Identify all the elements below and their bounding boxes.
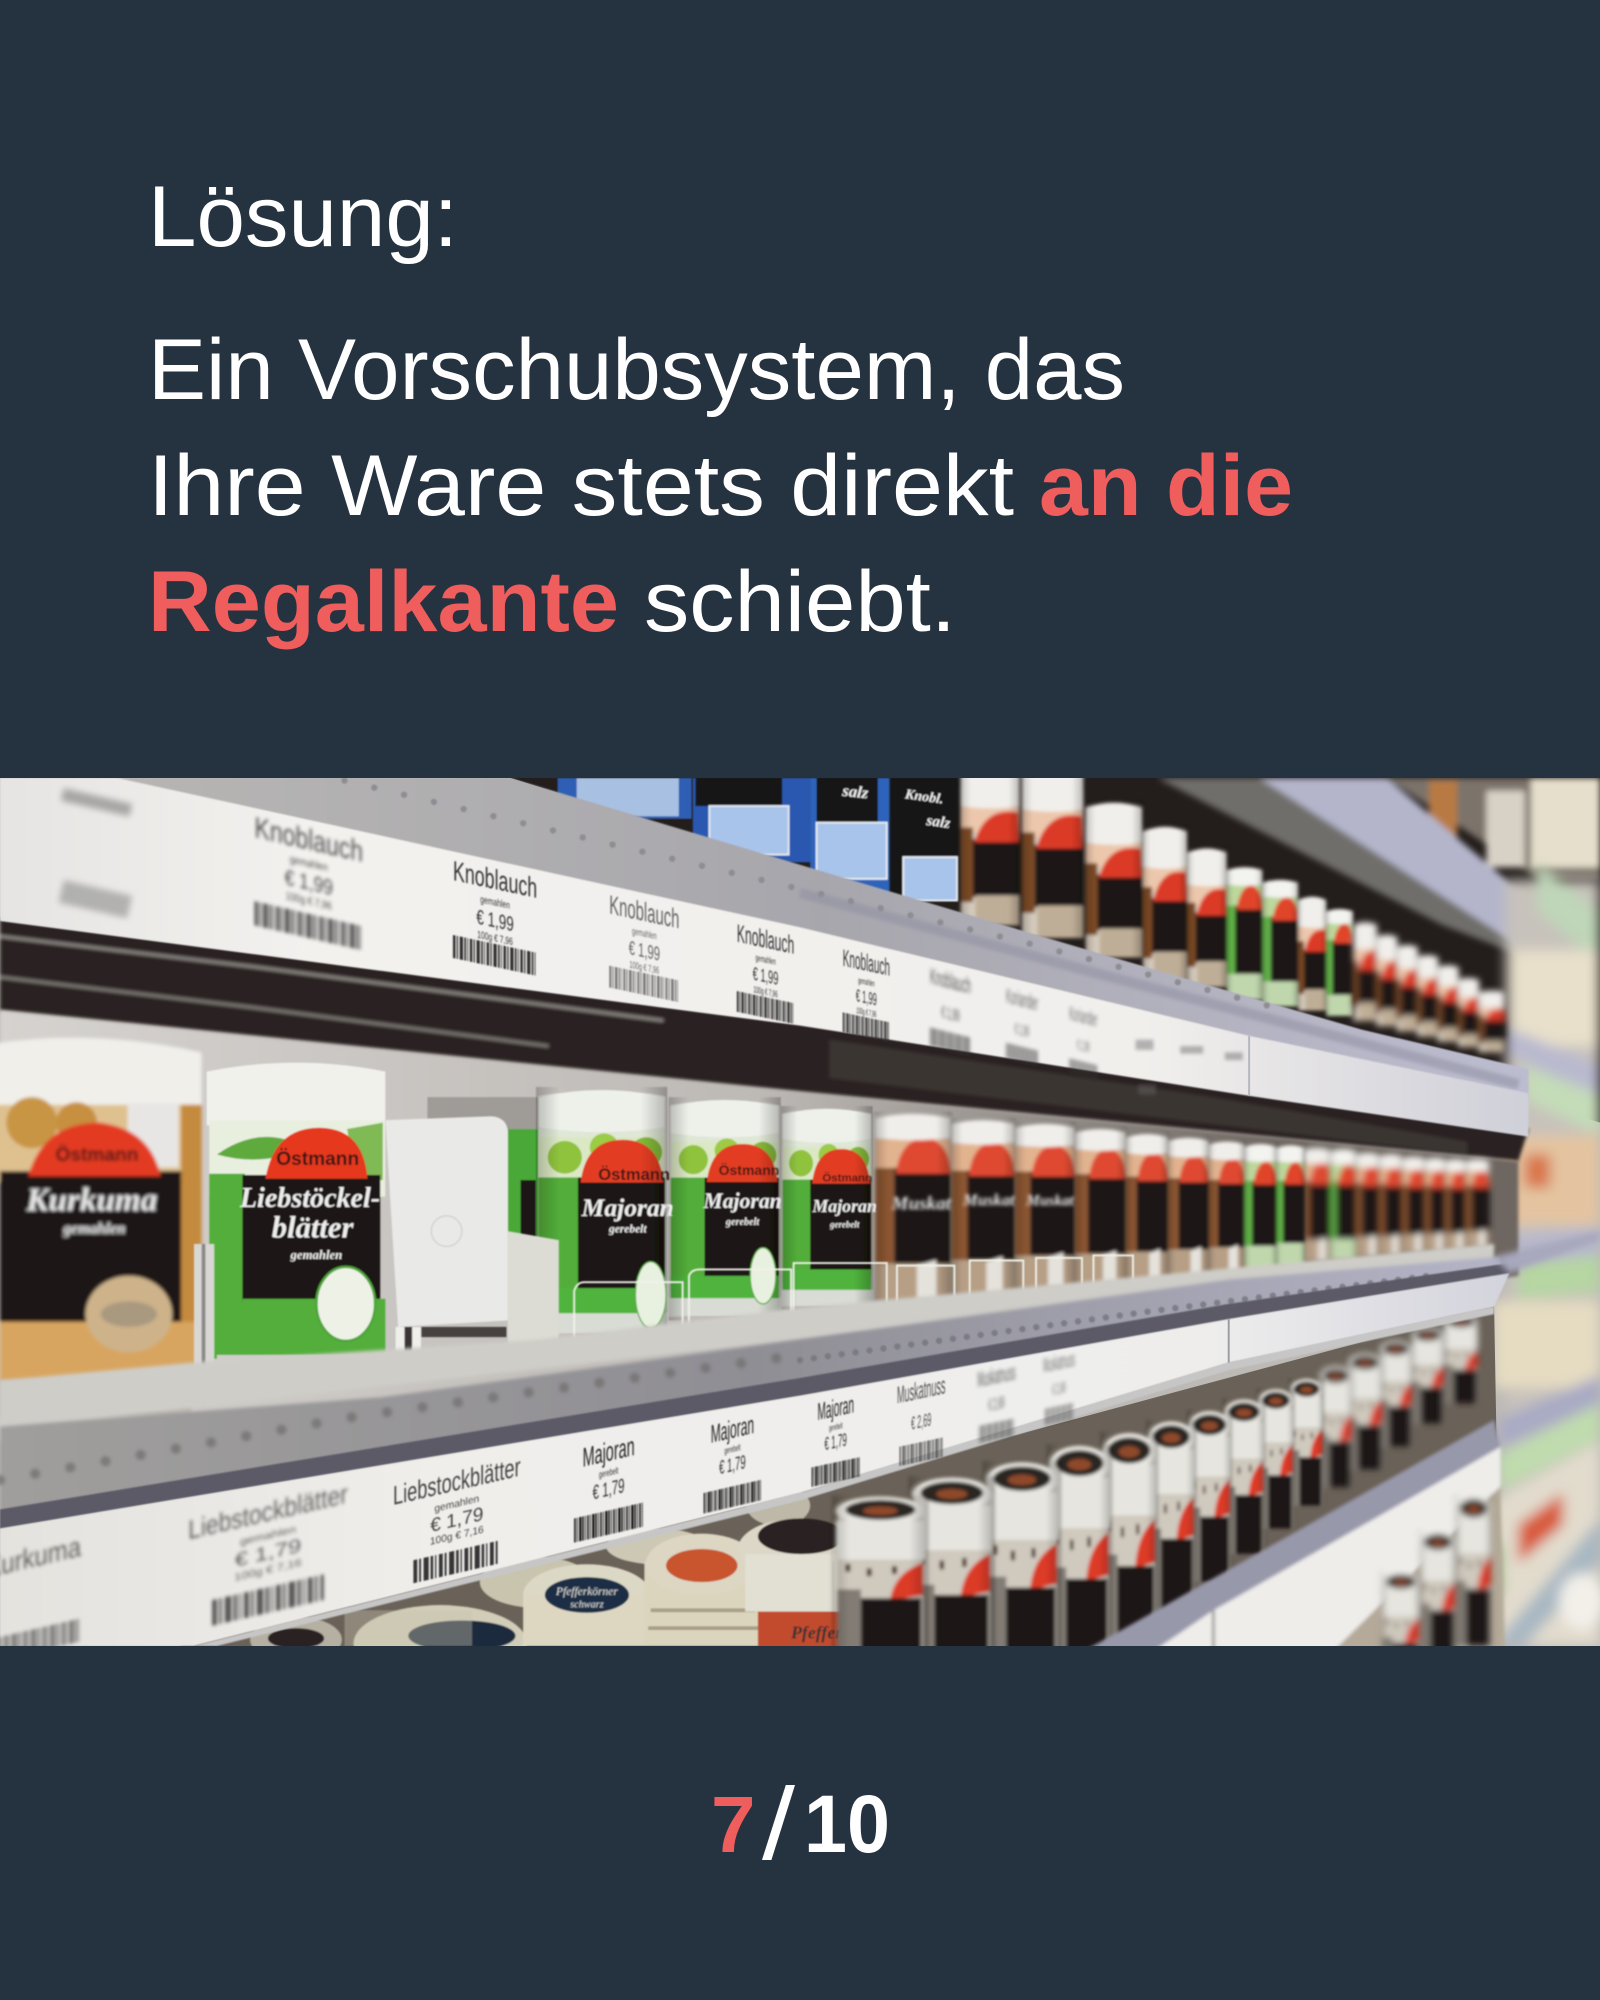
jar: Liebstöckelblätter: Liebstöckel- xyxy=(239,1183,380,1214)
heading: Lösung: Lösung: xyxy=(148,169,458,265)
price label: Koriander 1 xyxy=(1006,985,1038,1058)
jar: Majoran 1: gerebelt xyxy=(608,1223,647,1235)
heading line 1: Ein Vorschubsystem, das xyxy=(148,322,1125,418)
price label: Knoblauch 6: € 1,99 xyxy=(941,1003,960,1025)
price label: Muskatnuss 2: € 2,69 xyxy=(989,1393,1005,1415)
mid back wall xyxy=(0,1010,1518,1442)
price label: Majoran 2: gerebelt xyxy=(724,1443,740,1456)
middle shelf label strip xyxy=(0,1273,1509,1652)
price label: Liebstockblätter 1 xyxy=(188,1478,348,1618)
jar: Majoran 3: gerebelt xyxy=(829,1219,860,1229)
price label: Knoblauch 3 xyxy=(609,889,679,991)
bottom-row pepper jars xyxy=(832,1378,1324,1668)
jar: Majoran 3 xyxy=(781,1106,877,1310)
price label: Koriander 2: € 1,99 xyxy=(1077,1037,1089,1056)
jar: Kurkuma: Östmann xyxy=(56,1145,138,1166)
heading line 2: Ihre Ware stets direkt xyxy=(148,438,1014,534)
jar: Majoran 2 xyxy=(669,1097,782,1320)
price label: Knoblauch 3: gemahlen xyxy=(632,926,657,942)
heading line 3: schiebt. xyxy=(644,554,956,650)
price label: Liebstockblätter 2: 100g € 7,16 xyxy=(430,1525,484,1548)
price label: Koriander 1: Koriander xyxy=(1006,985,1038,1016)
blue boxes xyxy=(558,778,959,901)
lower zone dark background xyxy=(128,1306,1500,1659)
top-row jars xyxy=(959,763,1354,1018)
price label: Muskatnuss 2: Muskatnuss xyxy=(977,1360,1016,1392)
price label: blurred far-left xyxy=(59,788,132,918)
bottom-row tins: Pfefferkörner xyxy=(555,1586,618,1598)
jar: Liebstöckelblätter: Östmann xyxy=(276,1149,359,1170)
price label: Knoblauch 2 xyxy=(453,855,537,964)
price label: Majoran 2: Majoran xyxy=(711,1412,754,1449)
price label: Knoblauch 4 xyxy=(737,920,794,1014)
price label: Knoblauch 1: Knoblauch xyxy=(255,810,363,869)
jar: Liebstöckelblätter xyxy=(207,1063,385,1380)
salz label text xyxy=(841,781,951,832)
jar: Majoran 1: Östmann xyxy=(598,1165,670,1184)
price label: Liebstockblätter 2: gemahlen xyxy=(434,1494,479,1515)
price label: Knoblauch 5: € 1,99 xyxy=(856,986,877,1009)
jar: Majoran 2: Majoran xyxy=(702,1189,782,1213)
heading line 3 xyxy=(148,554,956,650)
price label: Muskatnuss 1: € 2,69 xyxy=(911,1408,931,1434)
back dark cavity xyxy=(510,778,1600,1123)
price label: Koriander 1: € 1,99 xyxy=(1015,1021,1029,1041)
price label: Knoblauch 5: gemahlen xyxy=(858,977,875,989)
Muskat labels on jars: Muskat xyxy=(890,1193,952,1214)
price label: Knoblauch 2: 100g € 7,96 xyxy=(477,928,513,948)
top shelf label strip xyxy=(0,778,1529,1137)
price label: Knoblauch 6 xyxy=(930,963,971,1047)
mid-row receding jars xyxy=(1301,1147,1490,1264)
price label: Koriander 2 xyxy=(1069,1002,1097,1073)
jar: Majoran 3: Majoran xyxy=(811,1196,877,1216)
Muskat labels on jars: Muskat xyxy=(1025,1193,1075,1210)
jar: Kurkuma xyxy=(0,1038,202,1416)
jar: Majoran 2: gerebelt xyxy=(725,1217,760,1228)
price label: Liebstockblätter 1: gemahlen xyxy=(240,1524,296,1548)
top-row products xyxy=(558,778,959,901)
price label: Knoblauch 4: € 1,99 xyxy=(753,964,778,990)
jar: Majoran 1: Majoran xyxy=(581,1193,674,1222)
price label: Muskatnuss 3: Muskatnuss xyxy=(1043,1348,1075,1378)
middle rail highlight at far end xyxy=(1494,1231,1600,1273)
Muskat labels on jars: Muskat xyxy=(962,1191,1016,1210)
transparent pusher dividers xyxy=(574,1255,1133,1346)
far-right blurred aisle xyxy=(1461,861,1600,1646)
salz label text: salz xyxy=(924,812,951,832)
Muskat labels on jars xyxy=(890,1191,1075,1214)
price label: Majoran 1 xyxy=(574,1429,643,1531)
price label: Knoblauch 1 xyxy=(255,810,363,938)
price label: Knoblauch 4: Knoblauch xyxy=(737,920,794,960)
jar: Liebstöckelblätter: blätter xyxy=(272,1211,354,1245)
page number xyxy=(711,1767,890,1881)
price label: Majoran 2: € 1,79 xyxy=(719,1452,746,1479)
price label: Majoran 2 xyxy=(704,1410,761,1503)
price label: Majoran 1: € 1,79 xyxy=(593,1475,625,1504)
price label: Knoblauch 3: € 1,99 xyxy=(629,938,660,966)
price label: Knoblauch 5: 100g € 7,96 xyxy=(856,1007,876,1020)
price label: Knoblauch 4: gemahlen xyxy=(755,952,776,967)
page number: current: 7 xyxy=(711,1780,756,1869)
price label: Knoblauch 2: gemahlen xyxy=(480,893,510,911)
blurred far labels xyxy=(1136,1040,1243,1095)
background xyxy=(0,778,1600,1646)
photo: supermarket spice shelf xyxy=(0,778,1600,1646)
price label: Knoblauch 2: € 1,99 xyxy=(476,905,514,936)
price label: Majoran 1: gerebelt xyxy=(599,1465,619,1480)
price label: Knoblauch 2: Knoblauch xyxy=(453,855,537,905)
jar: Majoran 3: Östmann xyxy=(822,1171,872,1184)
price label: Knoblauch 1: 100g € 7,96 xyxy=(286,890,332,913)
page number: slash: / xyxy=(762,1767,796,1881)
price label: Knoblauch 1: gemahlen xyxy=(290,854,328,875)
bottom-row tins: Pfeffer xyxy=(790,1622,843,1642)
price label: Liebstockblätter 2 xyxy=(393,1451,521,1576)
price label: Knoblauch 3: Knoblauch xyxy=(609,889,679,935)
middle shelf rail xyxy=(0,1257,1509,1529)
jar: Kurkuma: gemahlen xyxy=(62,1221,125,1238)
price label: Muskatnuss 1 xyxy=(897,1371,945,1457)
price label: Koriander 2: Koriander xyxy=(1069,1002,1097,1032)
upper-right shelf xyxy=(1157,778,1600,959)
price label: Knoblauch 4: 100g € 7,96 xyxy=(753,983,778,1000)
title xyxy=(148,169,1293,650)
price label: Kurkuma xyxy=(0,1531,81,1652)
price label: Majoran 3 xyxy=(812,1389,860,1477)
jar: Majoran 1 xyxy=(536,1087,674,1338)
price label: Majoran 3: € 1,79 xyxy=(825,1429,847,1454)
lower lavender shelf xyxy=(1070,1420,1506,1659)
top shelf rail xyxy=(117,778,1529,1100)
price label: Majoran 1: Majoran xyxy=(583,1430,635,1473)
price label: Liebstockblätter 2: € 1,79 xyxy=(430,1503,483,1537)
far bottom-row jars xyxy=(1318,1314,1480,1488)
price label: Majoran 3: Majoran xyxy=(818,1390,854,1425)
price label: Knoblauch 5: Knoblauch xyxy=(843,944,890,981)
price label: Liebstockblätter 1: Liebstockblätter xyxy=(188,1478,348,1545)
salz label text: Knobl. xyxy=(903,786,945,808)
jar: Kurkuma: Kurkuma xyxy=(25,1182,157,1219)
pusher: white plate xyxy=(194,1116,559,1403)
price label: Muskatnuss 2 xyxy=(977,1360,1016,1435)
lowest-shelf blurred jars xyxy=(1381,1495,1493,1687)
price label: Knoblauch 5 xyxy=(843,944,890,1032)
price label: Knoblauch 3: 100g € 7,96 xyxy=(630,959,660,976)
jar: Liebstöckelblätter: gemahlen xyxy=(290,1248,342,1262)
price label: Muskatnuss 1: Muskatnuss xyxy=(897,1371,945,1409)
price label: Knoblauch 6: Knoblauch xyxy=(930,963,971,999)
under-shelf dark band xyxy=(0,918,1529,1161)
price label: Muskatnuss 3: € 2,69 xyxy=(1052,1380,1066,1399)
price label: Liebstockblätter 1: 100g € 7,16 xyxy=(234,1557,302,1584)
shelf floor xyxy=(0,1244,1494,1429)
jar behind pusher xyxy=(427,1097,542,1238)
heading line 3: Regalkante xyxy=(148,554,619,650)
mid-row middle jars xyxy=(874,1112,1305,1304)
price label: Liebstockblätter 1: € 1,79 xyxy=(235,1534,301,1571)
price label: Muskatnuss 3 xyxy=(1043,1348,1075,1417)
salz label text: salz xyxy=(841,781,870,803)
heading line 2: an die xyxy=(1039,438,1293,534)
bottom-row tins: schwarz xyxy=(570,1600,604,1611)
page number: total: 10 xyxy=(804,1779,890,1870)
bottom-row tins xyxy=(250,1485,847,1682)
price label: Majoran 3: gerebelt xyxy=(829,1422,843,1434)
price label: Liebstockblätter 2: Liebstockblätter xyxy=(393,1451,521,1511)
price label: Knoblauch 1: € 1,99 xyxy=(285,866,333,901)
jar: Majoran 2: Östmann xyxy=(719,1162,779,1178)
